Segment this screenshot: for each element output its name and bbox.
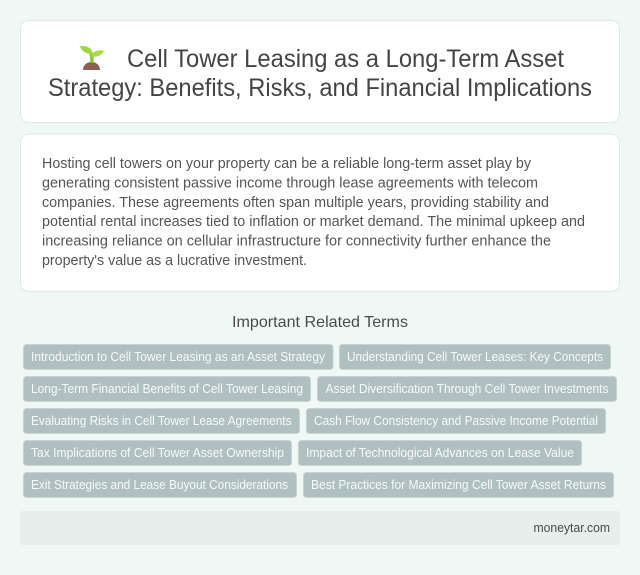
tag: [340, 344, 610, 370]
title: Strategy: Benefits, Risks, and Financial Implications: [48, 74, 592, 102]
tag: [304, 472, 614, 498]
tag: [24, 472, 296, 498]
panel: intro text card: potential rental increases tied to inflation or market demand. The minimal upkeep and: [42, 213, 585, 230]
panel: intro text card: Hosting cell towers on your property can be a reliable long-term asset play by: [42, 155, 531, 172]
tag: Evaluating Risks in Cell Tower Lease Agreements: [31, 413, 292, 428]
title: Cell Tower Leasing as a Long-Term Asset: [127, 45, 564, 73]
panel: intro text card: companies. These agreements often span multiple years, providing stability and: [42, 194, 549, 211]
heading: related terms: Important Related Terms: [232, 314, 408, 331]
tag: Best Practices for Maximizing Cell Tower Asset Returns: [311, 477, 606, 492]
tag: [24, 376, 310, 402]
panel: intro text card: property's value as a lucrative investment.: [42, 252, 307, 269]
footer bar: [20, 511, 620, 545]
footer source text: moneytar.com: [534, 520, 610, 535]
tag: Asset Diversification Through Cell Tower Investments: [326, 381, 609, 396]
panel: intro text card: increasing reliance on cellular infrastructure for connectivity further enhance the: [42, 233, 551, 250]
tag: Impact of Technological Advances on Lease Value: [306, 445, 574, 460]
tag: Exit Strategies and Lease Buyout Considerations: [31, 477, 288, 492]
tag: [24, 408, 300, 434]
tag: [306, 408, 606, 434]
icon: seedling: [80, 46, 104, 70]
tag: Cash Flow Consistency and Passive Income Potential: [314, 413, 598, 428]
tag: [24, 344, 333, 370]
panel: related term tags: [24, 344, 616, 498]
panel: intro text card: generating consistent passive income through lease agreements with telecom: [42, 174, 538, 191]
panel: title card: [20, 20, 620, 122]
tag: Tax Implications of Cell Tower Asset Ownership: [31, 445, 284, 460]
tag: Introduction to Cell Tower Leasing as an Asset Strategy: [31, 349, 325, 364]
panel: intro text card: [20, 134, 620, 292]
tag: Understanding Cell Tower Leases: Key Concepts: [347, 349, 603, 364]
tag: [24, 440, 292, 466]
tag: [318, 376, 616, 402]
tag: [298, 440, 582, 466]
title: [48, 45, 592, 102]
tag: Long-Term Financial Benefits of Cell Tower Leasing: [31, 381, 303, 396]
